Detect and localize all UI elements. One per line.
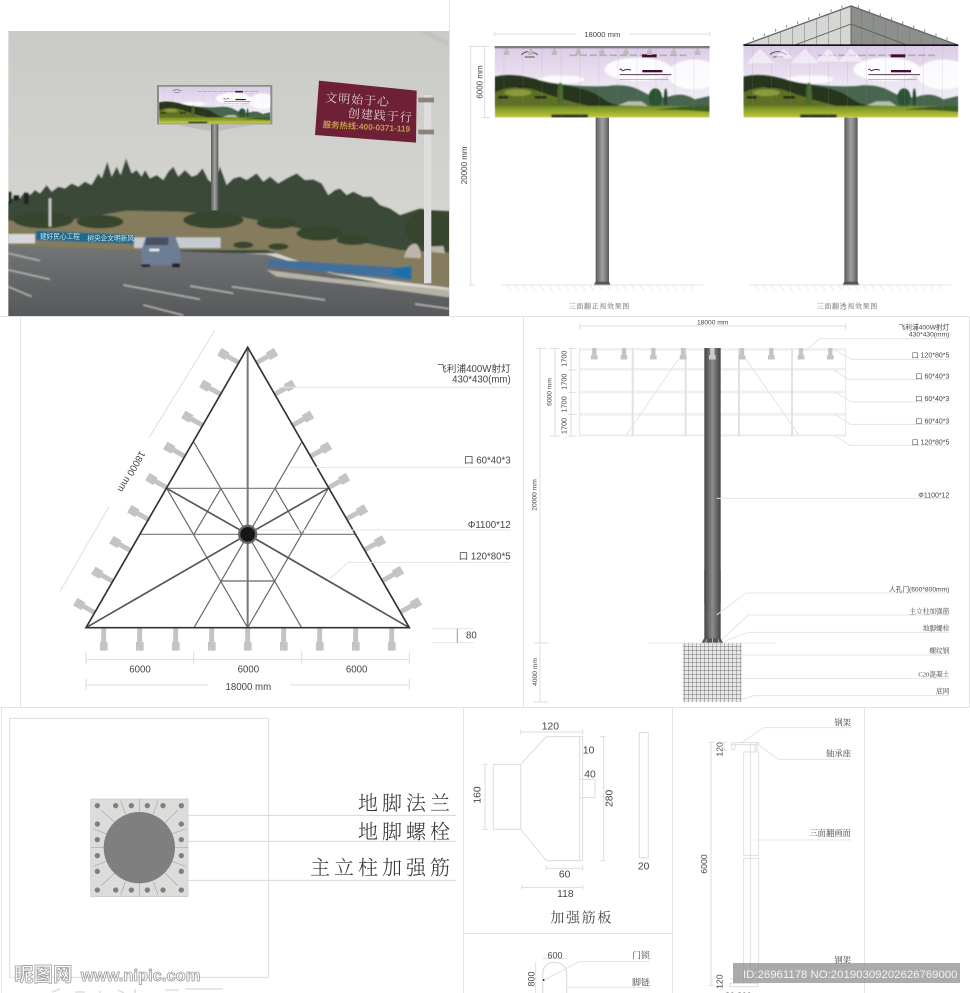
foundation leaders [717, 593, 949, 700]
stiffener dimensions: 60 [559, 870, 571, 881]
stiffener dimensions: 120 [542, 721, 559, 732]
photo tree line [0, 158, 467, 253]
front view artwork [495, 46, 721, 118]
panel: panel section elevation [699, 717, 852, 993]
photo roadside pole [418, 95, 434, 283]
panel: side elevation structure top: 18000 mm [697, 319, 729, 326]
photo road markings [8, 253, 449, 315]
section labels: 120 [714, 742, 724, 757]
front view dimension lines [468, 32, 710, 285]
front view dimension 6000: 6000 mm [476, 65, 485, 99]
elevation labels: Φ1100*12 [918, 492, 949, 499]
door labels: 800 [526, 971, 536, 986]
front view caption: 三面翻正视效果图 [569, 302, 630, 311]
photo wall banner text: 建好民心工程 [40, 231, 80, 240]
flange plate [91, 799, 188, 897]
perspective view billboard [743, 5, 970, 311]
plan labels: Φ1100*12 [468, 520, 511, 531]
front view ground [502, 284, 703, 286]
perspective view roof [743, 5, 958, 46]
photo red banner [315, 81, 417, 143]
panel: stiffener plate [473, 721, 650, 927]
panel: front and perspective renderings [460, 5, 970, 311]
elevation column [704, 348, 721, 603]
panel: site photo of billboard: 树央企文明新风 [87, 234, 134, 243]
section outline [730, 743, 759, 987]
front view dimension 18000: 18000 mm [584, 30, 620, 39]
anchor bolts [95, 803, 184, 893]
plan leader lines [257, 387, 511, 643]
panel: access door [526, 949, 651, 993]
flange label: 地脚法兰: 地脚法兰 [358, 787, 454, 816]
elevation lamps [591, 348, 834, 357]
elevation labels: 口 60*40*3 [916, 395, 949, 403]
elevation labels: 口 60*40*3 [916, 372, 949, 380]
watermark: image id: ID:26961178 NO:20190309202626769000 [743, 969, 958, 981]
elevation labels [899, 322, 950, 499]
door labels: 脚链 [632, 977, 650, 988]
panel: side elevation structure top: 20000 mm [532, 479, 539, 511]
section labels: 钢架 [834, 955, 852, 965]
elevation labels: 飞利浦400W射灯 [899, 322, 950, 331]
perspective view pole [842, 117, 859, 285]
panel: side elevation foundation [648, 570, 950, 702]
plan labels: 口 60*40*3 [464, 455, 511, 466]
panel: triangular frame plan [60, 330, 511, 693]
perspective view lamp beams [747, 48, 863, 63]
stiffener dimensions: 40 [584, 769, 596, 780]
section labels: 三面翻画面 [809, 829, 851, 838]
photo sky [8, 31, 449, 295]
foundation left dimension: 4000 mm [532, 658, 539, 686]
section labels: 6000 [699, 854, 709, 874]
stiffener dimensions [473, 721, 650, 900]
plan inner truss [140, 442, 355, 628]
photo car [142, 236, 180, 265]
photo billboard [157, 85, 276, 210]
stiffener dimensions: 280 [604, 789, 615, 807]
watermark: image id [733, 963, 960, 983]
section labels: 120 [714, 974, 724, 989]
panel: side elevation structure top [532, 319, 950, 643]
plan labels: 80 [466, 631, 477, 642]
section labels [699, 717, 852, 993]
perspective view caption: 三面翻透视效果图 [817, 302, 878, 311]
foundation labels: 底网 [936, 687, 950, 696]
stiffener ribs [91, 799, 188, 897]
panel: side elevation structure top: 1700 [560, 351, 569, 367]
column section [104, 812, 175, 883]
photo wall banner [8, 234, 35, 243]
photo red banner: 服务热线:400-0371-119 [323, 119, 411, 134]
plan labels: 6000 [129, 665, 151, 676]
stiffener dimensions: 10 [583, 746, 595, 757]
foundation labels [889, 585, 950, 696]
perspective view ground [750, 284, 952, 286]
door labels: 600 [547, 950, 562, 960]
stiffener dimensions: 118 [557, 889, 574, 900]
photo bushes [13, 210, 455, 250]
stiffener dimensions: 160 [473, 786, 484, 804]
panel: side elevation structure top: 1700 [560, 396, 569, 412]
outer foundation outline [10, 718, 269, 977]
stiffener title: 加强筋板 [550, 907, 613, 927]
photo red banner: 创建践于行 [347, 105, 413, 125]
perspective view artwork [743, 46, 970, 118]
flange label: 地脚螺栓: 地脚螺栓 [358, 816, 454, 845]
ground line [648, 642, 776, 644]
photo boulders [404, 244, 445, 258]
section labels: 轴承座 [826, 748, 852, 758]
plan labels: 6000 [346, 665, 367, 676]
stiffener outline [493, 733, 648, 861]
front view pole [594, 117, 611, 285]
plan central column [238, 525, 257, 544]
cropped caption fragment [52, 989, 223, 993]
column base [701, 570, 723, 643]
watermark: nipic logo: 昵图网 www.nipic.com [14, 964, 200, 986]
door labels [526, 949, 651, 988]
plan labels: 6000 [238, 665, 259, 676]
concrete footing mesh [683, 643, 742, 702]
door leaders [544, 962, 650, 987]
elevation leaders [717, 339, 949, 498]
photo guard rail [268, 259, 412, 280]
photo mound [0, 211, 467, 290]
foundation labels: 主立柱加强筋 [909, 607, 950, 616]
elevation labels: 口 60*40*3 [916, 418, 949, 426]
door labels: 门锁 [632, 949, 651, 960]
traffic light [8, 192, 29, 204]
door outline [543, 962, 567, 993]
plan labels: 飞利浦400W射灯 [437, 363, 511, 375]
panel: anchor flange plan [10, 718, 456, 977]
elevation labels: 430*430(mm) [909, 331, 949, 338]
photo road [8, 245, 449, 316]
plan labels: 430*430(mm) [452, 375, 511, 386]
section labels: 钢架 [834, 717, 852, 727]
section dimension lines [708, 742, 727, 985]
plan labels: 18000 mm [226, 682, 271, 693]
panel: side elevation structure top: 1700 [560, 418, 569, 434]
elevation frame [580, 348, 846, 436]
foundation left dimension [532, 643, 548, 702]
stiffener dimension lines [482, 729, 606, 890]
flange leaders [175, 815, 456, 880]
door dimension lines [536, 959, 567, 993]
plan labels: 口 120*80*5 [459, 552, 511, 563]
foundation labels: 螺纹钢 [929, 646, 950, 655]
panel: site photo of billboard [8, 31, 449, 316]
foundation labels: 地脚螺栓 [923, 623, 950, 632]
plan lamps [75, 352, 420, 646]
plan outer triangle [86, 347, 409, 628]
stiffener dimensions: 20 [638, 862, 650, 873]
plan labels: 18000 mm [115, 449, 147, 494]
panel: side elevation structure top: 6000 mm [547, 378, 554, 406]
elevation labels: 口 120*80*5 [912, 439, 949, 447]
elevation dimensions [536, 323, 846, 643]
front view dimension 20000: 20000 mm [460, 146, 469, 184]
foundation labels: C20混凝土 [918, 670, 950, 679]
section leaders [733, 728, 851, 982]
plan main spokes [86, 347, 409, 628]
photo red banner: 文明始于心 [325, 90, 391, 109]
front view lamps [495, 46, 710, 55]
foundation labels: 人孔门(600*800mm) [889, 585, 949, 594]
panel: side elevation structure top: 1700 [560, 374, 569, 390]
plan dimension lines [60, 330, 409, 690]
elevation labels: 口 120*80*5 [912, 352, 949, 360]
flange label: 主立柱加强筋: 主立柱加强筋 [310, 851, 454, 880]
front view billboard [460, 30, 721, 311]
plan labels [115, 363, 511, 693]
